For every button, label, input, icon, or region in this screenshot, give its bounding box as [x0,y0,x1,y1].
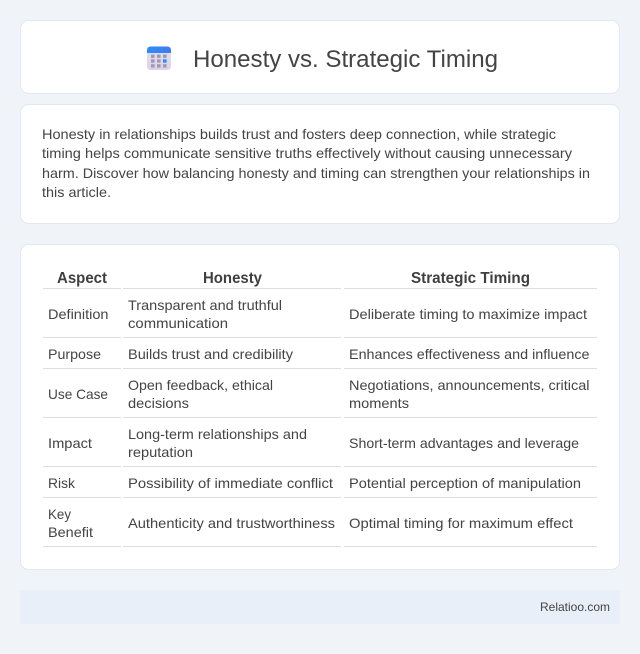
row: purpose: Enhances effectiveness and influence [349,346,590,362]
row: impact: Impact [48,435,92,451]
row: impact: reputation [128,444,193,460]
intro text [42,126,590,200]
row: purpose: Builds trust and credibility [128,346,293,362]
row: key benefit: Benefit [48,524,93,540]
row: definition [48,297,587,331]
row: impact [48,426,579,460]
footer bar [20,590,620,624]
row: definition: communication [128,315,228,331]
row: key benefit [48,506,573,540]
panel: comparison table [20,244,620,570]
title: Honesty vs. Strategic Timing [193,46,498,73]
row: key benefit: Authenticity and trustworthiness [128,515,335,531]
row: key benefit: Key [48,506,71,522]
row: definition: Transparent and truthful [128,297,282,313]
row: impact: Long-term relationships and [128,426,307,442]
intro text: this article. [42,184,111,200]
row: risk [48,475,581,491]
row: definition: Deliberate timing to maximize impact [349,306,587,322]
table header: Strategic Timing [411,270,530,287]
row: purpose [48,346,590,362]
row: key benefit: Optimal timing for maximum effect [349,515,573,531]
row: use case: Open feedback, ethical [128,377,273,393]
row: risk: Possibility of immediate conflict [128,475,333,491]
intro text: harm. Discover how balancing honesty and timing can strengthen your relationships in [42,165,590,181]
row: risk: Potential perception of manipulation [349,475,581,491]
icon: calendar [147,46,171,70]
row: risk: Risk [48,475,76,491]
row: purpose: Purpose [48,346,101,362]
intro text: Honesty in relationships builds trust and fosters deep connection, while strategic [42,126,556,142]
intro text: timing helps communicate sensitive truths effectively without causing unnecessary [42,145,572,161]
footer credit: Relatioo.com [540,600,610,614]
row: use case [48,377,590,411]
row: use case: Use Case [48,386,108,402]
table header: Aspect [57,270,108,287]
row: definition: Definition [48,306,108,322]
row: use case: Negotiations, announcements, critical [349,377,590,393]
row: use case: decisions [128,395,189,411]
title panel [20,20,620,94]
row: use case: moments [349,395,409,411]
panel: introduction [20,104,620,224]
table header: Honesty [203,270,262,287]
table header [57,270,530,287]
row: impact: Short-term advantages and leverage [349,435,579,451]
